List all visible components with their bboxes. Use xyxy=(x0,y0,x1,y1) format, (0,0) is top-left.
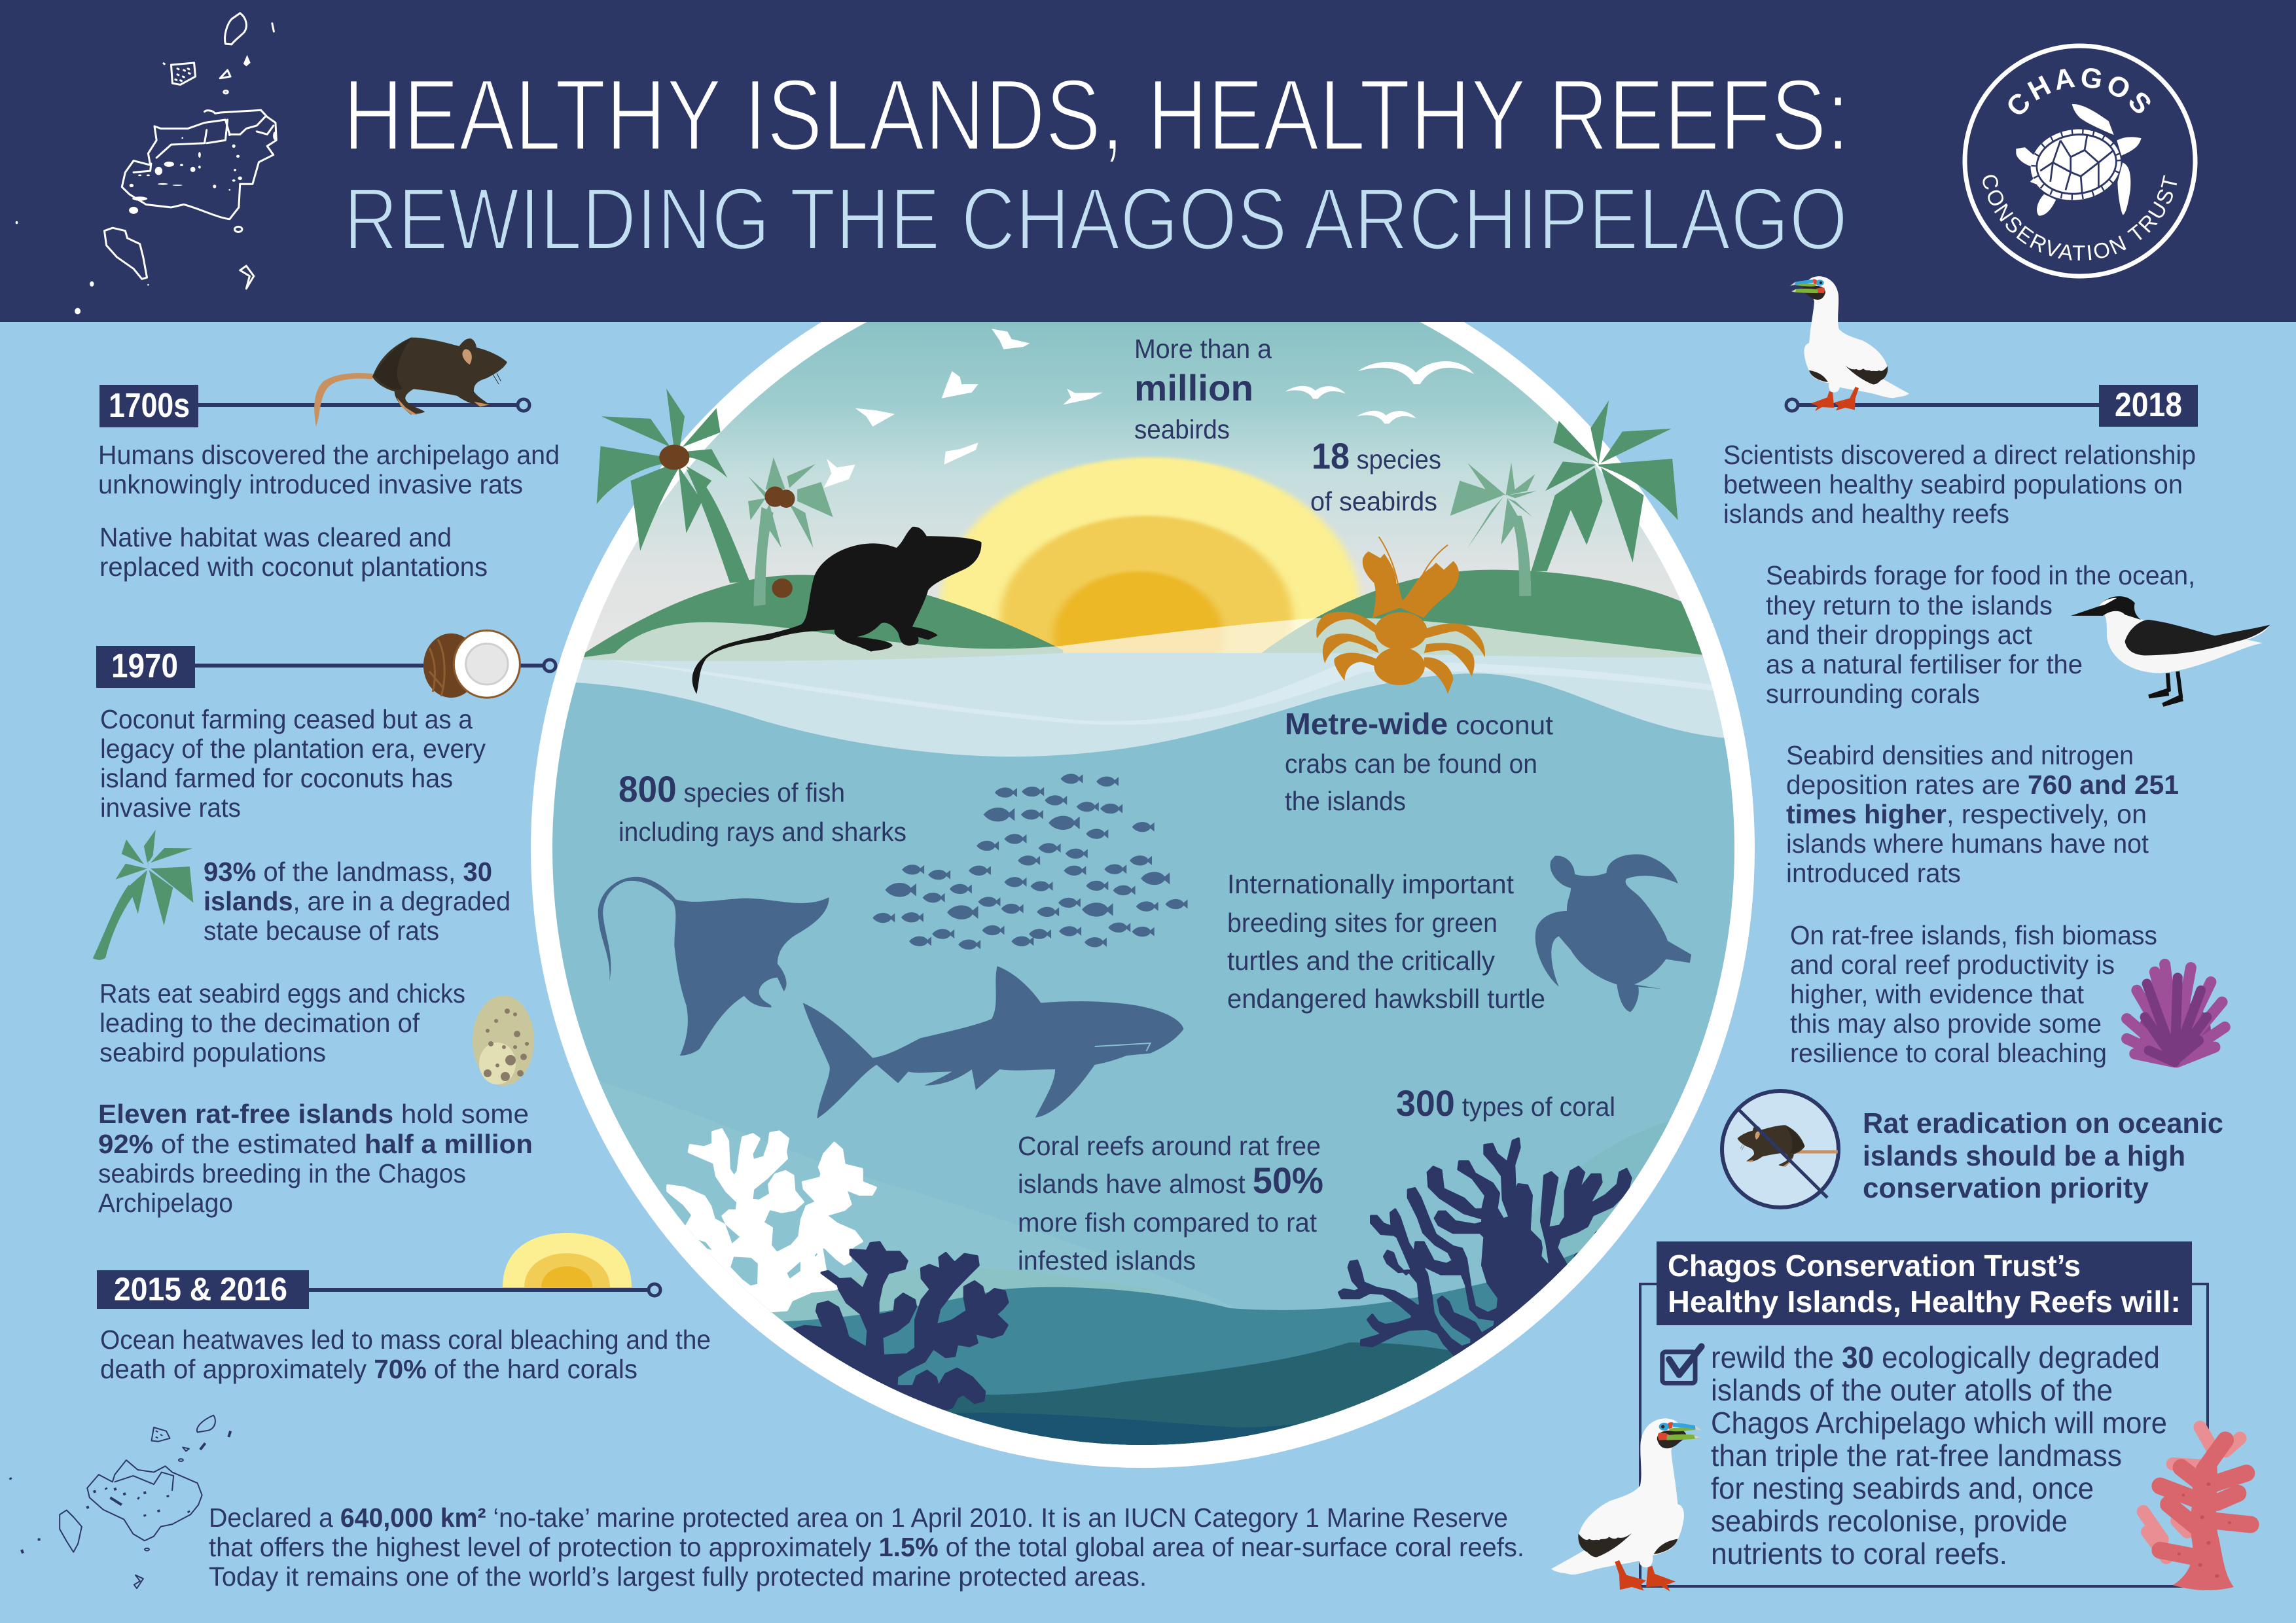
wave highlights xyxy=(603,659,1738,725)
text: marine protected area xyxy=(209,1503,1524,1592)
text: seabirds forage: surrounding corals xyxy=(1766,679,1980,709)
text: 93% of landmass xyxy=(204,857,511,946)
sea xyxy=(524,673,1761,781)
scene clipped inside circle xyxy=(524,314,1767,1487)
text: 93% of landmass: islands, are in a degraded xyxy=(204,886,511,916)
text: 18 species: of seabirds xyxy=(1310,486,1437,516)
icon: brown rat xyxy=(314,338,507,427)
flying seabirds xyxy=(823,329,1474,488)
text: heatwaves: death of approximately 70% of the hard corals xyxy=(100,1354,637,1384)
text: seabirds forage: they return to the islands xyxy=(1766,590,2053,620)
text: heatwaves xyxy=(100,1325,711,1384)
title xyxy=(343,58,1850,268)
text: densities xyxy=(1786,740,2179,888)
coconuts xyxy=(659,445,689,470)
text: 800 species of fish: 800 species of fish xyxy=(619,768,845,810)
text: rats eat eggs: leading to the decimation of xyxy=(99,1008,420,1038)
panel heading xyxy=(1657,1241,2192,1325)
icon: red coral xyxy=(2144,1427,2251,1590)
text: rats eat eggs xyxy=(99,978,465,1067)
text: turtles: endangered hawksbill turtle xyxy=(1227,984,1545,1014)
text: fish biomass xyxy=(1790,920,2157,1068)
text: 1700s: unknowingly introduced invasive rats xyxy=(98,469,523,499)
text: fish biomass: resilience to coral bleaching xyxy=(1790,1038,2107,1068)
text: eleven rat-free islands xyxy=(98,1099,533,1218)
text: a million seabirds: More than a xyxy=(1134,334,1272,364)
title: REWILDING THE CHAGOS ARCHIPELAGO xyxy=(344,169,1848,268)
text: 93% of landmass: state because of rats xyxy=(204,916,439,946)
map: archipelago outline navy xyxy=(10,1416,230,1588)
text: 2018: between healthy seabird populations on xyxy=(1723,469,2183,499)
timeline 2018 xyxy=(1786,385,2198,427)
logo: Chagos Conservation Trust: CHAGOS xyxy=(2008,68,2151,114)
icon: palm tree xyxy=(93,830,193,960)
title: HEALTHY ISLANDS, HEALTHY REEFS: xyxy=(343,58,1850,171)
text: rat eradication: conservation priority xyxy=(1863,1172,2149,1204)
text: coconut crabs: Metre-wide coconut xyxy=(1285,707,1554,741)
coconuts small palm xyxy=(764,486,795,597)
timeline 1970: 1970 xyxy=(111,647,178,685)
text: 800 species of fish xyxy=(619,768,906,847)
text: 1970: invasive rats xyxy=(100,793,241,823)
text: seabirds forage: and their droppings act xyxy=(1766,620,2033,650)
icon: checkbox xyxy=(1662,1346,1702,1383)
icon: no rats sign xyxy=(1722,1091,1839,1207)
text: eleven rat-free islands: 92% of the estimated half a million xyxy=(98,1129,533,1159)
text: densities: islands where humans have not xyxy=(1786,829,2149,859)
palms and animals in the upper scene xyxy=(597,329,1678,694)
text: panel body: islands of the outer atolls of the xyxy=(1711,1373,2113,1407)
text: marine protected area: that offers the highest level of protection to approximately 1.5% of the total global area of near-surface coral reefs. xyxy=(209,1532,1524,1562)
icon: small sun xyxy=(503,1233,632,1287)
text: seabirds forage: as a natural fertiliser for the xyxy=(1766,649,2083,679)
text: 300 types of coral: 300 types of coral xyxy=(1396,1082,1615,1124)
text: fish biomass: On rat-free islands, fish biomass xyxy=(1790,920,2157,950)
navy coral left xyxy=(794,1242,1008,1410)
timeline 1700s: 1700s xyxy=(109,387,190,425)
text: 1700s: replaced with coconut plantations xyxy=(99,552,488,582)
text: panel body: seabirds recolonise, provide xyxy=(1711,1504,2068,1538)
text: panel body xyxy=(1711,1340,2167,1571)
text: a million seabirds xyxy=(1134,334,1272,444)
white ring xyxy=(531,230,1755,1468)
icon: purple coral xyxy=(2127,964,2225,1062)
text: 2018 xyxy=(1723,440,2196,529)
text: rats eat eggs: seabird populations xyxy=(99,1037,326,1067)
palm tree left small xyxy=(748,457,833,606)
shark xyxy=(803,966,1183,1118)
text: densities: times higher, respectively, on xyxy=(1786,799,2147,829)
text: seabirds forage xyxy=(1766,560,2195,709)
text: 2018: islands and healthy reefs xyxy=(1723,499,2009,529)
fish school xyxy=(872,774,1188,950)
text: 1700s: Native habitat was cleared and xyxy=(99,522,452,552)
text: panel body: for nesting seabirds and, once xyxy=(1711,1471,2094,1505)
text: eleven rat-free islands: seabirds breeding in the Chagos xyxy=(98,1158,466,1188)
timeline 1700s xyxy=(99,385,529,427)
text: coral reefs 50%: infested islands xyxy=(1018,1245,1196,1275)
text: 1970: legacy of the plantation era, every xyxy=(100,734,486,764)
text: a million seabirds: seabirds xyxy=(1134,414,1230,444)
icon: sooty tern xyxy=(2071,596,2270,705)
navy coral right xyxy=(1339,1139,1631,1358)
seabed layers xyxy=(600,1081,815,1344)
text: coconut crabs: the islands xyxy=(1285,786,1406,816)
text: panel body: than triple the rat-free landmass xyxy=(1711,1438,2122,1472)
left column timeline xyxy=(10,338,1524,1592)
text: fish biomass: higher, with evidence that xyxy=(1790,979,2085,1009)
text: densities: Seabird densities and nitrogen xyxy=(1786,740,2134,770)
text: eleven rat-free islands: Eleven rat-free islands hold some xyxy=(98,1099,529,1129)
text: 800 species of fish: including rays and sharks xyxy=(619,817,906,847)
text: rat eradication xyxy=(1863,1107,2223,1204)
map: archipelago outline white xyxy=(16,13,276,314)
text: coral reefs 50%: more fish compared to rat xyxy=(1018,1207,1318,1238)
text: a million seabirds: million xyxy=(1134,367,1253,408)
text: coral reefs 50%: Coral reefs around rat free xyxy=(1018,1131,1321,1161)
text: fish biomass: this may also provide some xyxy=(1790,1008,2102,1039)
panel heading: Chagos Conservation Trust’s xyxy=(1668,1249,2081,1283)
panel: Healthy Islands commitments xyxy=(1640,1241,2208,1586)
sun xyxy=(936,455,1365,653)
text: marine protected area: Declared a 640,000 km² ‘no-take’ marine protected area on 1 April 2010. It is an IUCN Category 1 Marine Reserve xyxy=(209,1503,1508,1533)
text: coconut crabs xyxy=(1285,707,1554,816)
icon: coconut xyxy=(423,630,520,698)
text: densities: introduced rats xyxy=(1786,858,1961,888)
text: panel body: Chagos Archipelago which will more xyxy=(1711,1406,2167,1440)
text: coral reefs 50% xyxy=(1018,1131,1323,1275)
text: panel body: rewild the 30 ecologically degraded xyxy=(1711,1340,2160,1374)
island right xyxy=(1261,570,1721,662)
island left xyxy=(571,575,1063,665)
black rat silhouette xyxy=(692,527,981,694)
sea creatures xyxy=(598,774,1691,1118)
timeline 2015 and 2016: 2015 & 2016 xyxy=(114,1271,287,1308)
text: marine protected area: Today it remains one of the world’s largest fully protected marine protected areas. xyxy=(209,1561,1147,1592)
white bleached coral xyxy=(666,1130,876,1311)
text: panel body: nutrients to coral reefs. xyxy=(1711,1537,2007,1571)
icon: seabird egg xyxy=(473,995,534,1086)
text: 1700s: Humans discovered the archipelago and xyxy=(98,440,560,470)
text: fish biomass: and coral reef productivity is xyxy=(1790,950,2115,980)
logo: Chagos Conservation Trust: CONSERVATION TRUST xyxy=(1982,175,2177,260)
text: coconut crabs: crabs can be found on xyxy=(1285,749,1537,779)
text: rat eradication: islands should be a high xyxy=(1863,1140,2185,1172)
sky xyxy=(585,322,1681,652)
palm tree right small xyxy=(1450,463,1537,596)
header band xyxy=(0,0,2296,322)
text: coral reefs 50%: islands have almost 50% xyxy=(1018,1160,1323,1201)
beach and shallow band xyxy=(581,618,1704,665)
palm tree right large xyxy=(1531,401,1678,571)
callouts inside circle xyxy=(619,334,1615,1275)
text: 1970: Coconut farming ceased but as a xyxy=(100,704,473,734)
central circle illustration xyxy=(531,322,1755,1468)
text: 18 species: 18 species xyxy=(1312,435,1441,476)
text: 2018: Scientists discovered a direct relationship xyxy=(1723,440,2196,470)
logo turtle xyxy=(2016,104,2142,216)
sea turtle xyxy=(1535,854,1691,1012)
coconut crab xyxy=(1316,537,1485,694)
text: 1970 xyxy=(100,704,486,823)
timeline 2015 and 2016 xyxy=(97,1270,660,1309)
text: heatwaves: Ocean heatwaves led to mass coral bleaching and the xyxy=(100,1325,711,1355)
text: rats eat eggs: Rats eat seabird eggs and chicks xyxy=(99,978,465,1008)
text: seabirds forage: Seabirds forage for food in the ocean, xyxy=(1766,560,2195,590)
manta ray xyxy=(598,877,829,1056)
palm tree left large xyxy=(597,389,749,583)
text: rat eradication: Rat eradication on oceanic xyxy=(1863,1107,2223,1139)
icon: red-footed booby bottom xyxy=(1551,1418,1702,1592)
text: densities: deposition rates are 760 and 251 xyxy=(1786,770,2179,800)
text: 18 species xyxy=(1310,435,1441,516)
timeline 2018: 2018 xyxy=(2115,386,2182,424)
text: turtles: breeding sites for green xyxy=(1227,908,1498,938)
panel heading: Healthy Islands, Healthy Reefs will: xyxy=(1668,1285,2181,1319)
foam xyxy=(524,653,1729,781)
text: eleven rat-free islands: Archipelago xyxy=(98,1188,233,1218)
text: 1970: island farmed for coconuts has xyxy=(100,763,453,793)
text: turtles: turtles and the critically xyxy=(1227,946,1495,976)
timeline 1970 xyxy=(96,646,556,688)
icon: red-footed booby top xyxy=(1790,276,1909,411)
right column xyxy=(1551,276,2270,1592)
text: turtles: Internationally important xyxy=(1227,869,1515,899)
text: turtles xyxy=(1227,869,1545,1014)
text: 93% of landmass: 93% of the landmass, 30 xyxy=(204,857,492,887)
logo: Chagos Conservation Trust xyxy=(1962,43,2198,279)
text: 1700s xyxy=(98,440,560,582)
